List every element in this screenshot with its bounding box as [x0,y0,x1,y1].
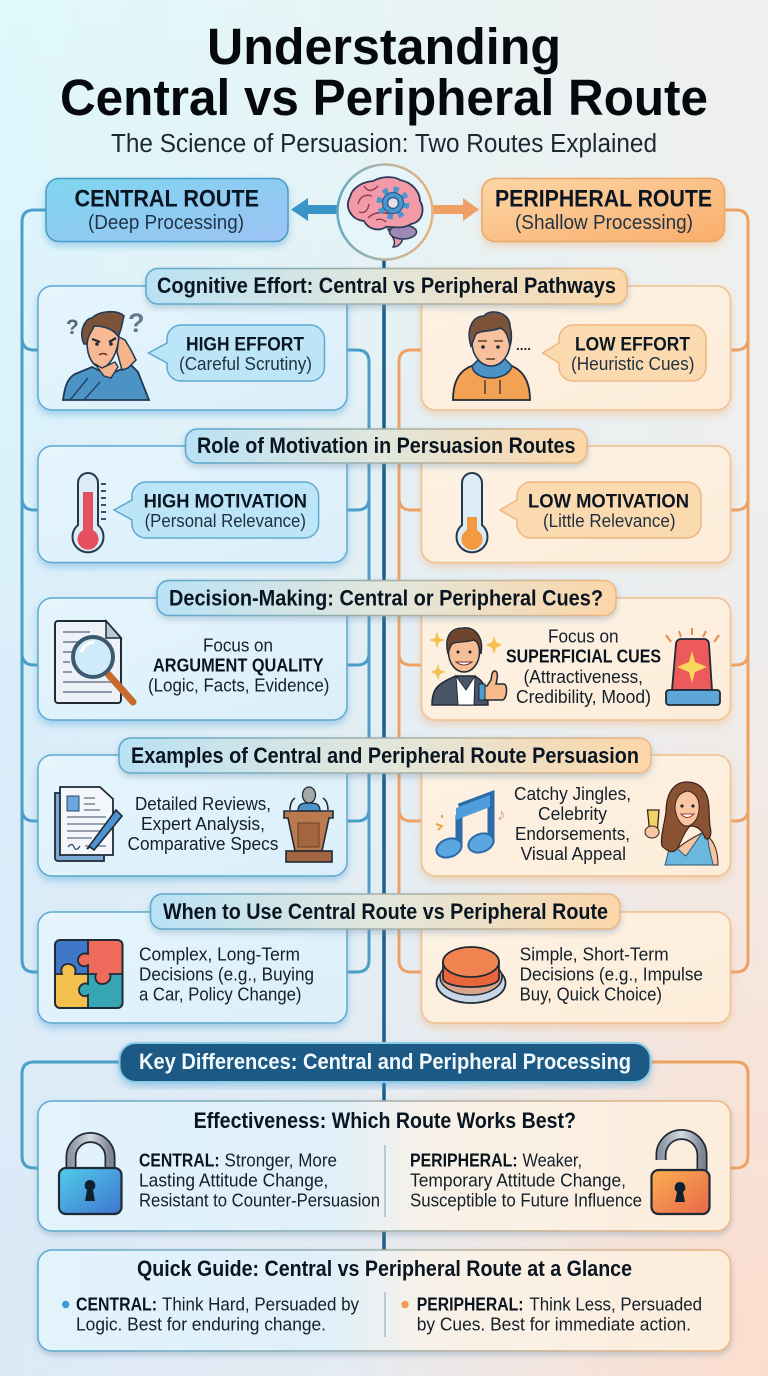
icon: thinking person: ? [128,308,144,338]
text: superficial cues: Focus on [548,626,619,647]
text: simple decisions: Simple, Short-Term [520,944,669,965]
heading: when to use [150,894,620,929]
text: central summary: CENTRAL: [76,1294,157,1315]
text: central effectiveness [139,1150,380,1211]
callout: high motivation: (Personal Relevance) [145,511,306,531]
panel: superficial cues [422,598,730,720]
icon: relaxed person in hoodie: .... [516,337,531,353]
heading: decision-making: Decision-Making: Central or Peripheral Cues? [169,586,603,610]
panel: peripheral route header [482,178,724,242]
panel: peripheral route header: (Shallow Processing) [515,212,693,234]
icon: puzzle [55,940,122,1008]
icon: celebrity woman with drink [645,782,718,865]
text: simple decisions: Buy, Quick Choice) [520,984,662,1005]
icon: music notes: ♪ [497,805,506,824]
panel: argument quality [38,598,347,720]
central spine line [382,258,386,1252]
peripheral route connectors [399,210,748,972]
text: complex decisions [139,944,314,1005]
panel: central route header: CENTRAL ROUTE [74,186,259,212]
text: central examples [128,793,278,854]
icon: brain with gear [338,164,432,260]
arrow: to central route [291,198,337,221]
text: central summary [62,1294,360,1335]
callout: high motivation [114,482,319,538]
text: peripheral effectiveness: Susceptible to Future Influence [410,1190,642,1211]
panel: quick guide [38,1250,730,1351]
title [60,18,708,126]
title: Central vs Peripheral Route [60,69,708,126]
panel: peripheral examples [422,755,730,876]
text: simple decisions [520,944,703,1005]
panel: complex decisions [38,912,347,1023]
text: superficial cues [506,626,661,707]
callout: low effort: (Heuristic Cues) [571,354,694,374]
callout: low effort [543,325,706,381]
text: central effectiveness: Stronger, More [224,1150,337,1171]
central route connectors [22,210,369,972]
panel: low motivation [422,446,730,562]
text: peripheral effectiveness: Temporary Attitude Change, [410,1170,626,1191]
text: complex decisions: Decisions (e.g., Buying [139,964,314,985]
text: superficial cues: SUPERFICIAL CUES [506,646,661,667]
text: peripheral effectiveness: Weaker, [522,1150,582,1171]
text: complex decisions: a Car, Policy Change) [139,984,302,1005]
callout: high effort: HIGH EFFORT [186,334,304,356]
text: superficial cues: (Attractiveness, [524,666,643,687]
text: central examples: Comparative Specs [128,833,278,854]
icon: impulse button [436,947,506,1003]
panel: low effort [422,286,730,410]
icon: attractive man with thumbs up [429,628,507,705]
text: central effectiveness: CENTRAL: [139,1150,220,1171]
text: peripheral summary: PERIPHERAL: [417,1294,524,1315]
key differences connectors [22,1062,748,1168]
panel: peripheral route header: PERIPHERAL ROUTE [495,186,712,212]
icon: report with pen [55,787,122,861]
heading: examples [119,738,651,773]
text: peripheral examples: Visual Appeal [521,843,626,864]
heading: key differences [120,1043,650,1082]
heading: examples: Examples of Central and Peripheral Route Persuasion [131,743,639,768]
heading: role of motivation: Role of Motivation in Persuasion Routes [197,433,576,458]
text: peripheral summary: by Cues. Best for immediate action. [417,1314,691,1335]
text: peripheral examples: Endorsements, [515,823,630,844]
text: peripheral effectiveness [410,1150,642,1211]
panel: high motivation [38,446,347,562]
panel: high effort [38,286,347,410]
text: peripheral summary [401,1294,702,1335]
text: peripheral examples: Celebrity [538,803,608,824]
panel: central route header: (Deep Processing) [88,212,244,234]
icon: closed lock [59,1138,122,1214]
callout: low motivation: (Little Relevance) [543,511,676,531]
text: simple decisions: Decisions (e.g., Impulse [520,964,703,985]
text: peripheral effectiveness: PERIPHERAL: [410,1150,518,1171]
subtitle: The Science of Persuasion: Two Routes Explained [111,130,657,158]
text: central effectiveness: Resistant to Counter-Persuasion [139,1190,380,1211]
icon: thinking person [63,308,149,400]
icon: document with magnifier [55,621,133,703]
icon: music notes [434,795,506,861]
text: superficial cues: Credibility, Mood) [516,686,651,707]
text: argument quality [148,635,329,696]
heading: decision-making [157,580,616,616]
callout: low motivation [500,482,701,538]
icon: thinking person: ? [66,316,79,339]
arrow: to peripheral route [433,198,479,221]
callout: low motivation: LOW MOTIVATION [528,492,689,513]
heading: key differences: Key Differences: Central and Peripheral Processing [139,1049,631,1074]
icon: relaxed person in hoodie [453,312,531,400]
text: central summary: Logic. Best for enduring change. [76,1314,326,1335]
text: peripheral examples [514,783,631,864]
callout: high effort: (Careful Scrutiny) [179,354,312,374]
callout: low effort: LOW EFFORT [575,334,690,356]
text: central examples: Expert Analysis, [141,813,265,834]
text: central examples: Detailed Reviews, [135,793,271,814]
icon: low thermometer [456,473,488,552]
text: peripheral summary: Think Less, Persuaded [529,1294,702,1315]
icon: siren light [666,628,720,705]
heading: when to use: When to Use Central Route vs Peripheral Route [163,899,608,924]
icon: speaker at podium [284,787,333,862]
panel title: quick guide: Quick Guide: Central vs Peripheral Route at a Glance [137,1256,632,1281]
panel: central examples [38,755,347,876]
callout: high effort [148,325,324,381]
icon: hot thermometer [72,473,106,552]
title: Understanding [207,18,561,75]
panel: effectiveness [38,1101,730,1231]
text: central summary: Think Hard, Persuaded by [162,1294,360,1315]
heading: role of motivation [186,429,587,463]
panel: simple decisions [422,912,730,1023]
heading: cognitive effort: Cognitive Effort: Central vs Peripheral Pathways [157,273,616,298]
callout: high motivation: HIGH MOTIVATION [144,492,307,513]
panel title: effectiveness: Effectiveness: Which Route Works Best? [194,1108,576,1133]
text: complex decisions: Complex, Long-Term [139,944,300,965]
text: argument quality: (Logic, Facts, Evidence) [148,675,329,696]
heading: cognitive effort [146,268,627,304]
text: argument quality: Focus on [203,635,273,656]
icon: open lock [652,1134,710,1214]
text: peripheral examples: Catchy Jingles, [514,783,631,804]
panel: central route header [46,178,288,242]
text: argument quality: ARGUMENT QUALITY [153,655,324,676]
text: central effectiveness: Lasting Attitude Change, [139,1170,328,1191]
